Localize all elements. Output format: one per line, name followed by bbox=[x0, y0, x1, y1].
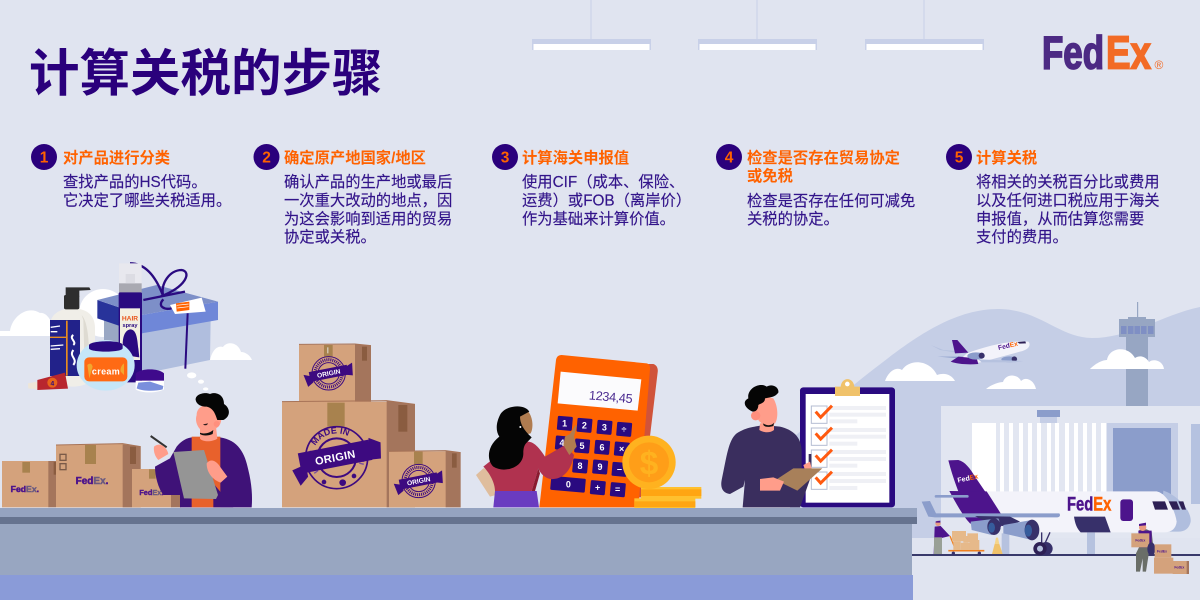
calculator keys: − bbox=[617, 464, 622, 474]
clipboard checklist with man bbox=[721, 379, 895, 507]
step 1 bbox=[31, 144, 231, 210]
step 3: 使用CIF（成本、保险、 bbox=[522, 174, 684, 191]
calculator body: 1234,45 bbox=[588, 388, 633, 406]
worker with boxes: FedEx bbox=[1157, 549, 1167, 553]
top box stamp: ORIGIN bbox=[317, 368, 341, 380]
step 4: 或免税 bbox=[747, 167, 793, 185]
calculator keys: 9 bbox=[597, 462, 602, 472]
stacked origin boxes bbox=[282, 344, 461, 508]
step 1: 对产品进行分类 bbox=[63, 149, 170, 167]
small flying plane: FedEx bbox=[998, 341, 1019, 352]
box small: FedEx. bbox=[139, 488, 163, 497]
FedEx logo: Fed bbox=[1042, 26, 1104, 78]
worker with boxes bbox=[1131, 523, 1189, 574]
large box stamp: MADE IN bbox=[311, 428, 350, 446]
worker with boxes: FedEx bbox=[1174, 566, 1184, 570]
step 5: 将相关的关税百分比或费用 bbox=[976, 174, 1160, 191]
calculator keys: + bbox=[595, 483, 600, 493]
step 4: 检查是否存在任何可减免 bbox=[747, 193, 915, 210]
cream jar bbox=[77, 340, 135, 391]
step 5 bbox=[946, 144, 1160, 246]
step 1: 它决定了哪些关税适用。 bbox=[63, 192, 231, 210]
ceiling lights bbox=[532, 0, 984, 50]
box large: FedEx. bbox=[76, 476, 109, 487]
large box stamp bbox=[292, 426, 381, 490]
step 3: 3 bbox=[501, 150, 510, 166]
man bbox=[721, 385, 822, 507]
top box bbox=[299, 344, 371, 402]
cargo plane: FedEx bbox=[1067, 495, 1112, 516]
step 2: 确认产品的生产地或最后 bbox=[284, 174, 452, 191]
right box bbox=[389, 451, 461, 507]
thought bubbles bbox=[187, 372, 208, 391]
counter bbox=[0, 508, 917, 600]
small flying plane bbox=[931, 340, 1030, 364]
cargo plane: FedEx bbox=[957, 473, 979, 485]
calculator keys: = bbox=[615, 485, 620, 495]
airport ground scene with cargo plane bbox=[912, 460, 1200, 574]
step 3: 作为基础来计算价值。 bbox=[522, 210, 675, 228]
step 5: 申报值，从而估算您需要 bbox=[976, 210, 1144, 228]
calculator keys: ÷ bbox=[622, 424, 627, 434]
hair spray can: HAIR bbox=[122, 316, 138, 323]
calculator keys: 0 bbox=[566, 479, 571, 489]
step 4: 检查是否存在贸易协定 bbox=[747, 149, 900, 167]
box left: FedEx. bbox=[11, 484, 39, 494]
airport background scene bbox=[790, 302, 1200, 538]
step 2 bbox=[254, 144, 452, 246]
step 3: 运费）或FOB（离岸价） bbox=[522, 192, 691, 210]
step 1: 1 bbox=[40, 150, 49, 166]
step 4: 关税的协定。 bbox=[747, 211, 839, 228]
large box bbox=[282, 401, 415, 507]
coin stacks bbox=[622, 436, 701, 510]
pump bottle bbox=[50, 287, 95, 387]
step 5: 支付的费用。 bbox=[976, 229, 1068, 246]
calculator keys: 1 bbox=[562, 418, 567, 428]
clipboard bbox=[800, 379, 895, 507]
calculator keys: 3 bbox=[602, 422, 607, 432]
calculator with woman and coins bbox=[476, 355, 701, 510]
step 2: 为这会影响到适用的贸易 bbox=[284, 211, 452, 228]
cargo plane bbox=[922, 460, 1191, 555]
step 4: 4 bbox=[725, 150, 734, 166]
right box stamp: ORIGIN bbox=[407, 476, 431, 488]
traffic cone bbox=[992, 538, 1003, 554]
box left bbox=[2, 461, 56, 507]
worker with cart bbox=[934, 521, 984, 555]
FedEx logo: Ex bbox=[1106, 26, 1151, 78]
calculator keys: 5 bbox=[579, 441, 584, 451]
title: 计算关税的步骤 bbox=[29, 45, 382, 102]
coin stacks: $ bbox=[640, 445, 659, 482]
step 1: 查找产品的HS代码。 bbox=[63, 174, 207, 191]
step 2: 确定原产地国家/地区 bbox=[284, 149, 426, 167]
calculator keys bbox=[550, 416, 632, 497]
cream jar: cream bbox=[92, 366, 120, 376]
step 4 bbox=[716, 144, 915, 228]
cloud behind products, left bbox=[0, 289, 252, 360]
small jar bbox=[136, 369, 164, 392]
step 2: 2 bbox=[262, 150, 271, 166]
box large bbox=[56, 443, 141, 507]
hair spray can: spray bbox=[122, 323, 138, 329]
red tube: 4 bbox=[50, 380, 54, 387]
step 2: 协定或关税。 bbox=[284, 229, 376, 246]
worker with boxes: FedEx bbox=[1135, 538, 1145, 542]
calculator keys: × bbox=[619, 444, 624, 454]
step 5: 计算关税 bbox=[976, 149, 1037, 167]
hair spray can bbox=[119, 263, 142, 382]
calculator keys: 4 bbox=[559, 438, 564, 448]
step 5: 5 bbox=[955, 150, 964, 166]
calculator keys: 7 bbox=[558, 459, 563, 469]
top box stamp bbox=[303, 357, 355, 390]
person with tablet bbox=[151, 393, 252, 507]
calculator keys: 6 bbox=[599, 442, 604, 452]
right box stamp bbox=[393, 464, 445, 498]
large box stamp: ORIGIN bbox=[314, 448, 357, 468]
FedEx logo: ® bbox=[1154, 58, 1164, 72]
step 3: 计算海关申报值 bbox=[522, 149, 629, 167]
step 3 bbox=[492, 144, 691, 228]
products thought bubble bbox=[28, 263, 218, 392]
FedEx logo bbox=[1042, 26, 1164, 78]
gift box bbox=[97, 263, 218, 374]
FedEx boxes left bbox=[2, 443, 181, 507]
calculator keys: 8 bbox=[577, 461, 582, 471]
calculator body bbox=[539, 355, 658, 507]
box small bbox=[132, 469, 181, 507]
step 5: 以及任何进口税应用于海关 bbox=[976, 192, 1160, 210]
red tube bbox=[28, 373, 68, 390]
calculator keys: 2 bbox=[582, 420, 587, 430]
woman bbox=[476, 406, 577, 507]
step 2: 一次重大改动的地点，因 bbox=[284, 192, 452, 210]
